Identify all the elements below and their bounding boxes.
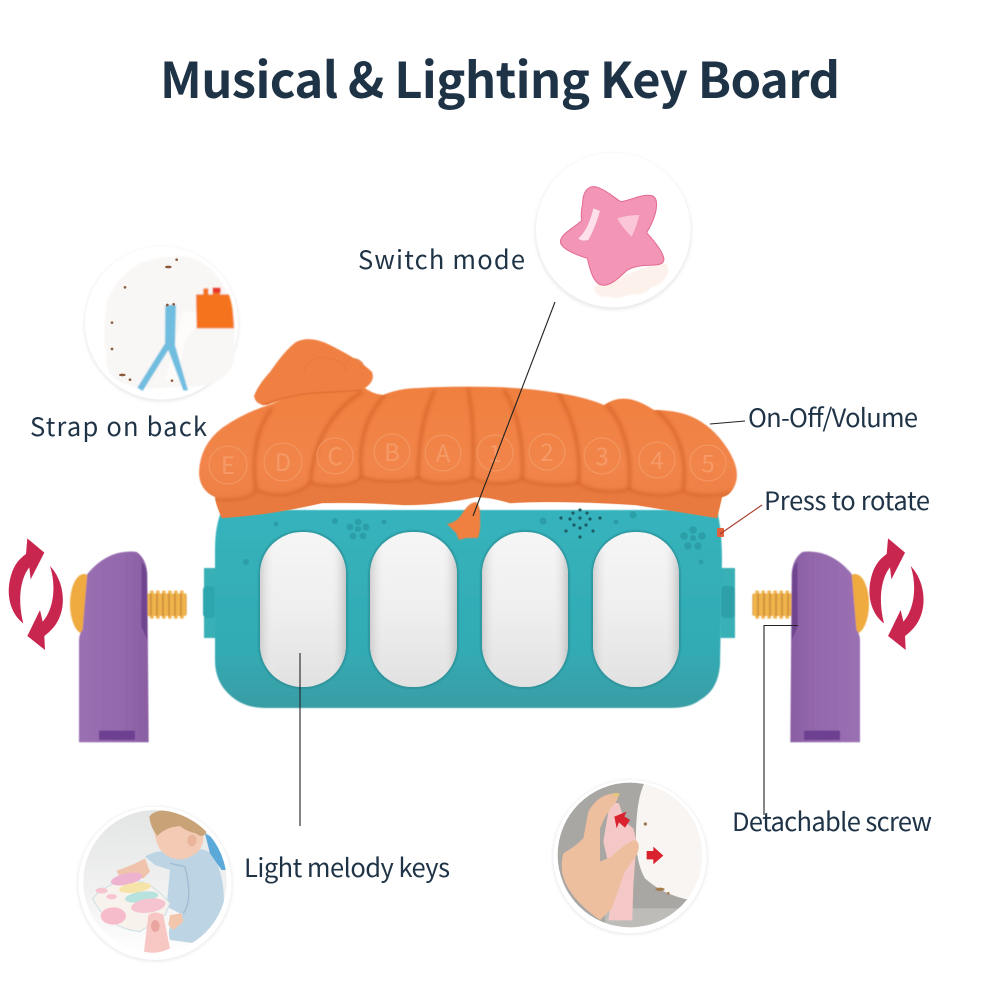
label: on-off volume: On-Off/Volume xyxy=(748,398,918,435)
pink post xyxy=(603,802,637,920)
right post with screw xyxy=(752,552,869,742)
icon: left rotate arrows xyxy=(9,538,63,650)
callout photo: baby playing xyxy=(78,807,232,961)
toy post xyxy=(144,912,170,953)
teal body xyxy=(215,510,722,708)
red arrow up-left xyxy=(614,812,630,828)
embossed roof letters: 1 xyxy=(488,434,502,469)
screw xyxy=(138,593,187,616)
keyboard toy xyxy=(199,339,740,708)
label: switch mode: Switch mode xyxy=(358,240,525,277)
embossed roof letters: B xyxy=(384,433,400,468)
toy in background xyxy=(205,833,227,870)
embossed roof letters: 5 xyxy=(701,444,715,479)
roof lobe shading xyxy=(254,388,684,492)
orange roof xyxy=(199,339,740,530)
left post with screw xyxy=(70,552,187,742)
leader lines xyxy=(300,302,798,826)
hand xyxy=(562,793,639,920)
label: light melody keys: Light melody keys xyxy=(244,848,450,885)
callout photo: strap on back xyxy=(84,246,239,402)
label: press to rotate: Press to rotate xyxy=(764,481,930,518)
embossed roof letters: 2 xyxy=(540,433,554,468)
white ball xyxy=(636,782,705,899)
embossed roof letters: 4 xyxy=(650,441,664,476)
pink star xyxy=(560,187,664,285)
embossed flowers and stars xyxy=(243,512,706,565)
screw holes xyxy=(644,822,647,826)
mushroom top xyxy=(254,339,373,405)
toy board xyxy=(93,880,170,932)
callout photo: detaching the post xyxy=(553,780,707,935)
embossed roof letters: D xyxy=(275,443,291,478)
title: Musical & Lighting Key Board xyxy=(160,42,840,113)
label: detachable screw: Detachable screw xyxy=(732,802,932,839)
side tabs xyxy=(203,568,735,638)
label: strap on back: Strap on back xyxy=(30,407,207,444)
arm and hand xyxy=(117,858,150,878)
blue strap xyxy=(137,305,188,391)
on-off switch button xyxy=(717,528,724,537)
embossed roof letters xyxy=(209,433,726,484)
white melody keys xyxy=(258,530,681,689)
head xyxy=(153,826,204,860)
baby body xyxy=(145,849,224,947)
embossed roof letters: 3 xyxy=(595,437,609,472)
roof lower band xyxy=(215,492,730,518)
embossed roof letters: E xyxy=(221,446,235,481)
cloud xyxy=(594,263,668,298)
icon: bell xyxy=(447,502,480,540)
roof silhouette xyxy=(199,386,737,518)
embossed roof letters: A xyxy=(436,434,451,469)
post body xyxy=(79,552,149,742)
roof scallop edge xyxy=(199,477,740,500)
callout photo: star switch xyxy=(535,153,692,310)
icon: right rotate arrows xyxy=(869,538,924,650)
red arrow right xyxy=(647,847,663,864)
orange tag xyxy=(196,288,234,328)
speaker dots xyxy=(559,508,602,539)
embossed roof letters: C xyxy=(327,437,343,472)
knob xyxy=(70,574,98,634)
